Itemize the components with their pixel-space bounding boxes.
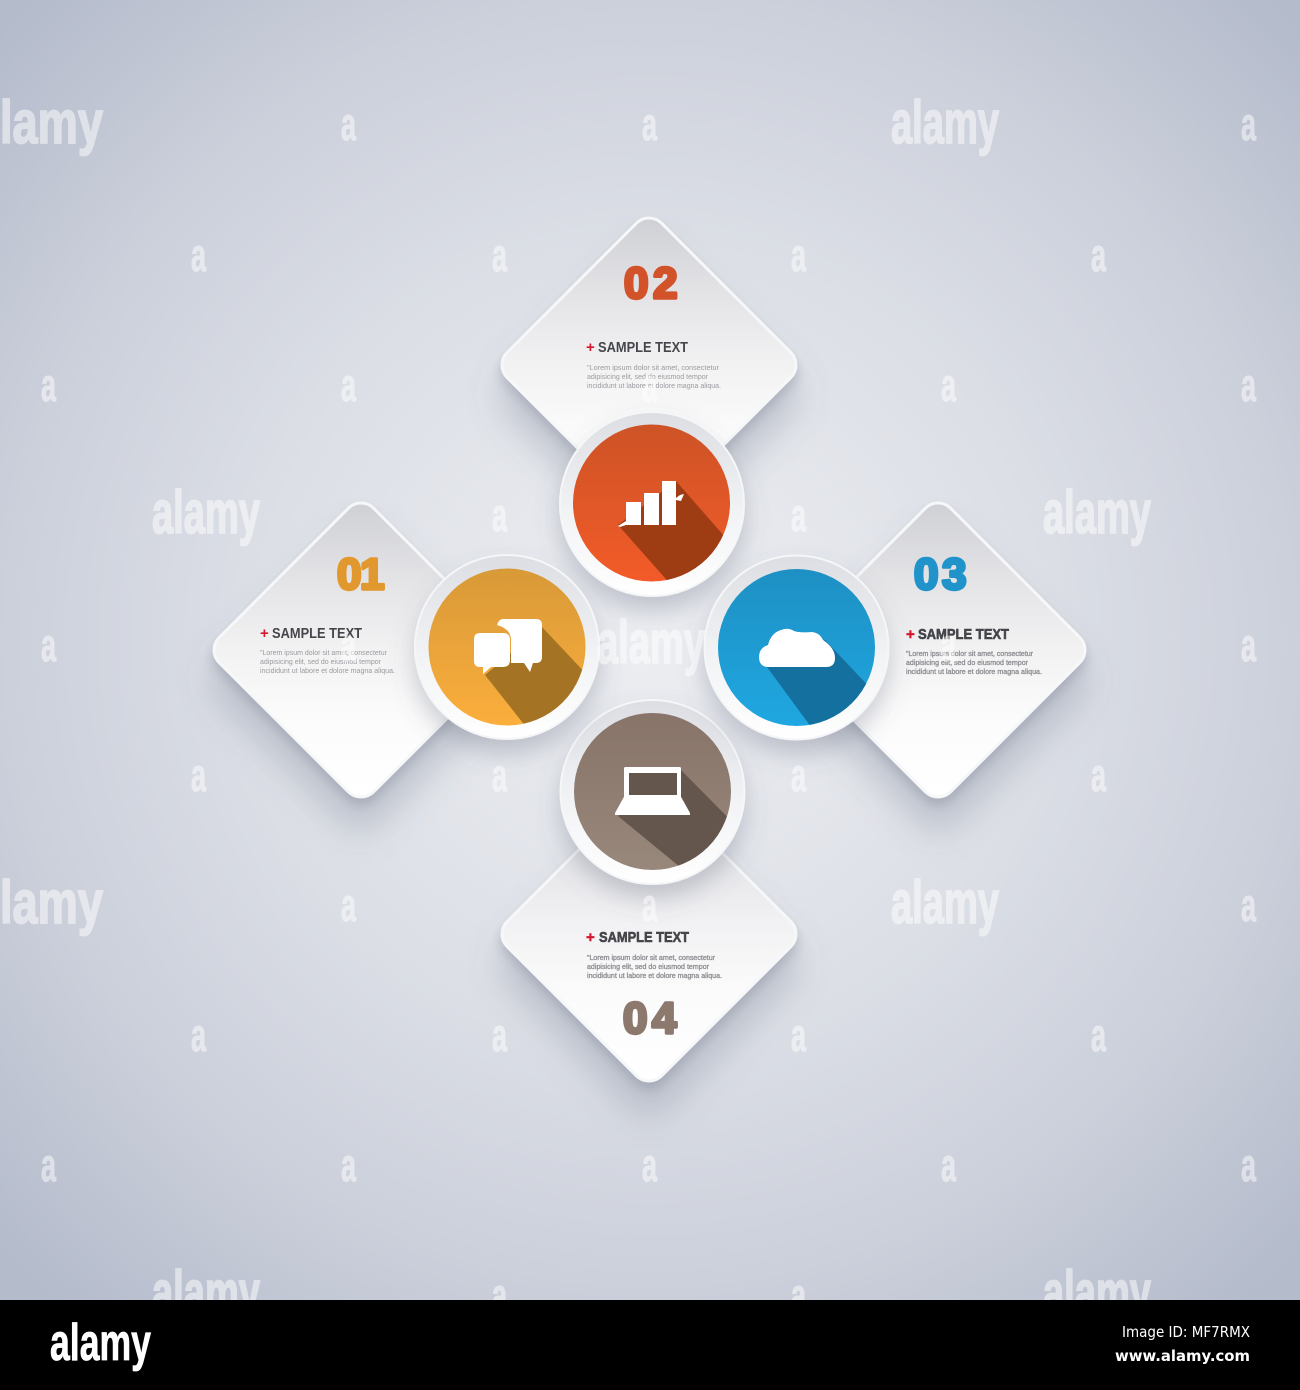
watermark: alamy: a [341, 359, 356, 411]
watermark: alamy: alamy [152, 1259, 260, 1326]
watermark: alamy: alamy [1043, 1259, 1151, 1326]
panel: card 03 [791, 503, 1085, 797]
body text 03: adipisicing elit, sed do eiusmod tempor [906, 658, 1028, 667]
watermark: alamy: a [191, 749, 206, 801]
body text 02: adipisicing elit, sed do eiusmod tempor [587, 372, 708, 381]
watermark: alamy: a [941, 1139, 956, 1191]
watermark: alamy: a [1241, 98, 1256, 150]
long shadow: laptop [618, 770, 727, 866]
watermark: alamy: a [1241, 1139, 1256, 1191]
circle: brown laptop [560, 700, 760, 900]
number 01: 01 [337, 550, 384, 599]
panel: card 02 [502, 218, 796, 512]
watermark: alamy: a [1091, 749, 1106, 801]
number 04: 04 [623, 994, 677, 1043]
watermark: alamy: a [1091, 229, 1106, 281]
body text 02 [587, 363, 721, 390]
watermark: alamy: a [791, 749, 806, 801]
icon: cloud [759, 629, 835, 667]
plus 01: + [260, 625, 269, 642]
watermark: alamy: a [1241, 359, 1256, 411]
watermark: alamy: a [791, 1009, 806, 1061]
circle: blue cloud [704, 556, 910, 780]
watermark: alamy: a [941, 619, 956, 671]
body text 01: adipisicing elit, sed do eiusmod tempor [260, 657, 381, 666]
body text 04 [587, 953, 722, 980]
body text 04: "Lorem ipsum dolor sit amet, consectetur [587, 953, 715, 962]
plus 04: + [586, 929, 595, 946]
footer logo: alamy [50, 1314, 151, 1372]
circle: yellow speech [415, 555, 620, 770]
panel: card 01 [214, 503, 508, 797]
watermark: alamy: alamy [891, 869, 999, 936]
watermark: alamy: lamy [0, 869, 103, 936]
watermark: alamy: a [492, 1009, 507, 1061]
body text 03 [906, 649, 1042, 676]
watermark: alamy: a [41, 359, 56, 411]
heading: sample text 01: SAMPLE TEXT [272, 626, 362, 642]
heading: sample text 03: SAMPLE TEXT [918, 627, 1009, 643]
watermark: alamy: a [492, 1269, 507, 1321]
circle: red chart [550, 413, 754, 620]
watermark: alamy: a [791, 229, 806, 281]
body text 01 [260, 648, 395, 675]
watermark: alamy: alamy [1043, 479, 1151, 546]
icon: speech bubbles [474, 619, 542, 674]
footer image id: Image ID: MF7RMX [1122, 1323, 1250, 1341]
watermark: alamy: a [41, 619, 56, 671]
watermark: alamy: a [191, 229, 206, 281]
watermark: alamy: a [791, 1269, 806, 1321]
plus 03: + [906, 626, 915, 643]
watermark: alamy: alamy [597, 609, 705, 676]
body text 03: "Lorem ipsum dolor sit amet, consectetur [906, 649, 1033, 658]
watermark: alamy: a [492, 489, 507, 541]
long shadow: speech [485, 627, 582, 724]
long shadow: cloud [767, 640, 866, 725]
watermark: alamy: a [341, 879, 356, 931]
watermark: alamy: a [191, 1009, 206, 1061]
watermark: alamy: a [941, 359, 956, 411]
watermark: alamy: lamy [0, 89, 103, 156]
plus 02: + [586, 339, 595, 356]
watermark: alamy: a [642, 98, 657, 150]
watermark: alamy: a [642, 359, 657, 411]
footer bar [0, 1300, 1300, 1390]
heading: sample text 04: SAMPLE TEXT [599, 930, 689, 946]
body text 01: incididunt ut labore et dolore magna aliqua. [260, 666, 395, 675]
icon: laptop [615, 767, 690, 815]
footer url: www.alamy.com [1115, 1347, 1250, 1365]
watermark: alamy: a [341, 98, 356, 150]
number 02: 02 [624, 259, 677, 308]
watermark: alamy: a [341, 1139, 356, 1191]
watermark: alamy: a [1241, 619, 1256, 671]
body text 04: incididunt ut labore et dolore magna aliqua. [587, 971, 722, 980]
watermark: alamy: alamy [152, 479, 260, 546]
body text 02: incididunt ut labore et dolore magna aliqua. [587, 381, 721, 390]
body text 02: "Lorem ipsum dolor sit amet, consectetur [587, 363, 719, 372]
watermark: alamy: alamy [891, 89, 999, 156]
watermark: alamy: a [642, 879, 657, 931]
watermark: alamy: a [1241, 879, 1256, 931]
body text 03: incididunt ut labore et dolore magna aliqua. [906, 667, 1042, 676]
body text 04: adipisicing elit, sed do eiusmod tempor [587, 962, 709, 971]
watermark: alamy: a [341, 619, 356, 671]
watermark: alamy: a [642, 1139, 657, 1191]
watermark: alamy: a [791, 489, 806, 541]
body text 01: "Lorem ipsum dolor sit amet, consectetur [260, 648, 387, 657]
icon: bar chart [618, 481, 684, 527]
panel: card 04 [502, 787, 796, 1081]
watermark: alamy: a [492, 749, 507, 801]
heading: sample text 02: SAMPLE TEXT [598, 340, 688, 356]
number 03: 03 [914, 550, 966, 599]
watermark: alamy: a [1091, 1009, 1106, 1061]
long shadow: chart [618, 481, 723, 580]
watermark: alamy: a [492, 229, 507, 281]
watermark: alamy: a [41, 1139, 56, 1191]
